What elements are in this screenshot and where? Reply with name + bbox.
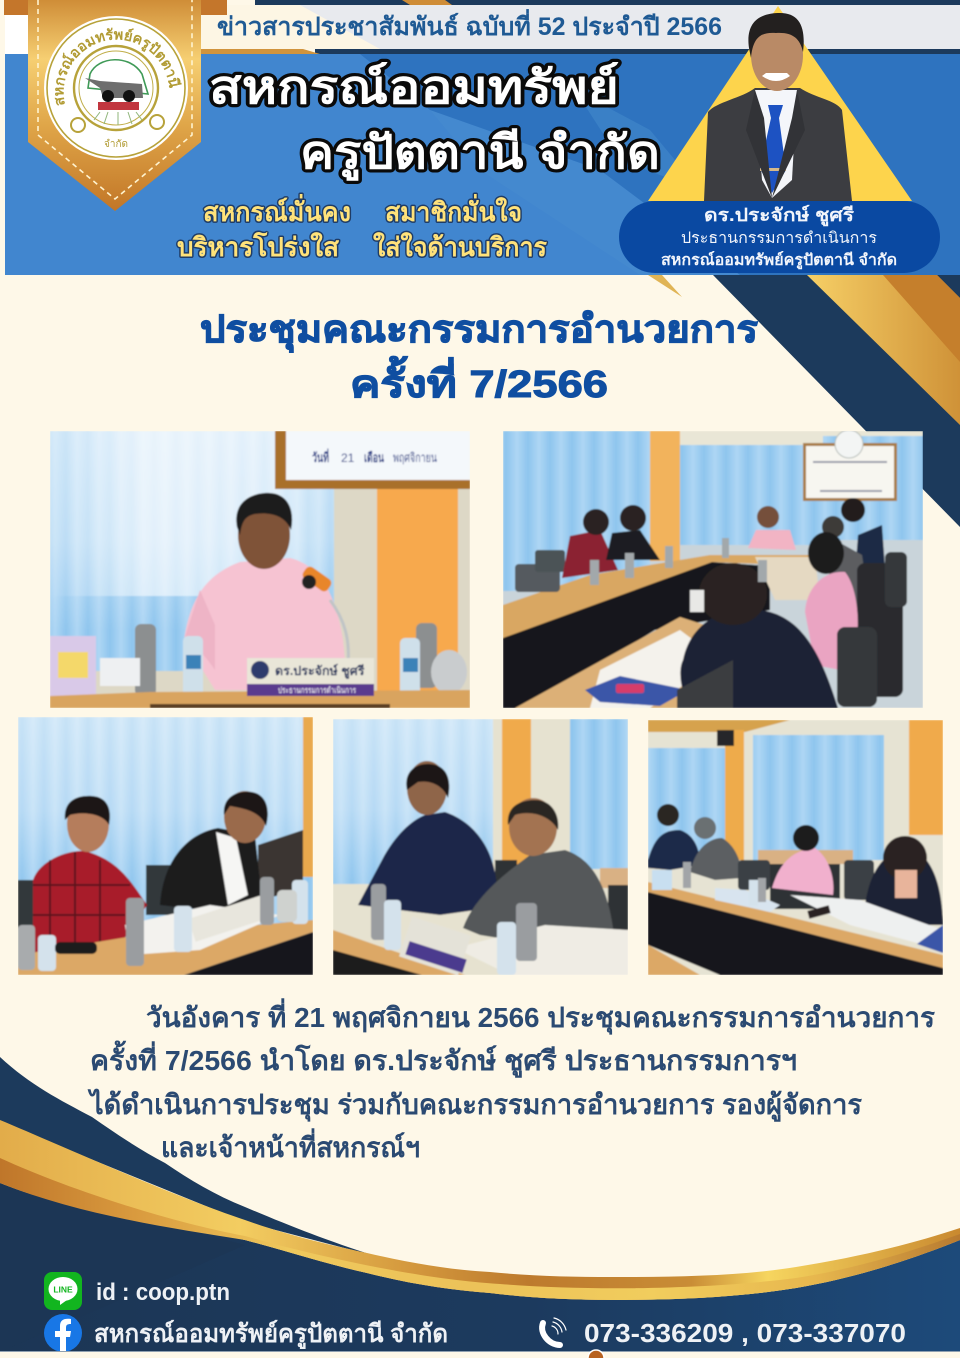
slogan [177,193,547,262]
slogan: สมาชิกมั่นใจ [385,193,522,227]
president portrait on yellow triangle [648,6,912,201]
main heading: ครั้งที่ 7/2566 [350,356,608,406]
Facebook page name: สหกรณ์ออมทรัพย์ครูปัตตานี จำกัด [94,1319,448,1350]
president name pill: สหกรณ์ออมทรัพย์ครูปัตตานี จำกัด [661,251,897,271]
photo 2: wide meeting room [503,431,923,708]
body text: และเจ้าหน้าที่สหกรณ์ฯ [161,1128,420,1163]
photo 3: two committee members [18,717,313,975]
photo 1: chairman at desk: วันที่ [312,448,329,465]
slogan: สหกรณ์มั่นคง [203,193,351,227]
photo 1: chairman at desk: เดือน [364,450,384,465]
photo 1: chairman at desk: พฤศจิกายน [393,450,437,465]
icon: LINE: LINE [53,1284,73,1294]
top news band [5,0,960,54]
photo 1: chairman at desk: 21 [341,451,355,465]
cooperative seal logo: จำกัด [104,139,128,150]
icon: phone [542,1318,566,1345]
main heading: ประชุมคณะกรรมการอำนวยการ [200,309,759,353]
gold ribbon badge [28,0,201,211]
organisation title [209,61,660,181]
icon: LINE [44,1272,82,1310]
body text: ครั้งที่ 7/2566 นำโดย ดร.ประจักษ์ ชูศรี ประธานกรรมการฯ [90,1040,797,1078]
photo 1: chairman at desk: ประธานกรรมการดำเนินการ [278,685,356,695]
newsletter issue line: ข่าวสารประชาสัมพันธ์ ฉบับที่ 52 ประจำปี 2566 [217,9,722,41]
president name pill: ประธานกรรมการดำเนินการ [681,230,877,247]
bottom cream strip with dot [0,1350,960,1358]
body text: วันอังคาร ที่ 21 พฤศจิกายน 2566 ประชุมคณะกรรมการอำนวยการ [146,998,935,1035]
top right corner stripes [648,275,960,527]
body text: ได้ดำเนินการประชุม ร่วมกับคณะกรรมการอำนวยการ รองผู้จัดการ [87,1088,862,1122]
LINE id: id : coop.ptn [96,1279,230,1306]
ribbon fold left and right [4,0,227,15]
organisation title: ครูปัตตานี จำกัด [300,126,660,181]
header blue panel [5,54,960,275]
president name pill [619,201,940,273]
photo 1: chairman at desk [50,431,470,708]
main heading [200,309,759,406]
organisation title: สหกรณ์ออมทรัพย์ [209,61,619,113]
body text [87,998,935,1163]
cooperative seal logo: สหกรณ์ออมทรัพย์ครูปัตตานี [54,28,182,106]
slogan: ใส่ใจด้านบริการ [373,232,547,262]
bottom wave decoration [0,1057,960,1352]
photo 1: chairman at desk: ดร.ประจักษ์ ชูศรี [275,663,365,679]
photo 5: four members along the table [648,720,943,975]
photo 4: two committee members writing [333,719,628,975]
phone numbers: 073-336209 , 073-337070 [584,1318,906,1348]
cooperative seal logo [44,16,188,160]
president name pill: ดร.ประจักษ์ ชูศรี [704,204,854,227]
icon: Facebook [44,1314,82,1352]
slogan: บริหารโปร่งใส [177,231,339,262]
